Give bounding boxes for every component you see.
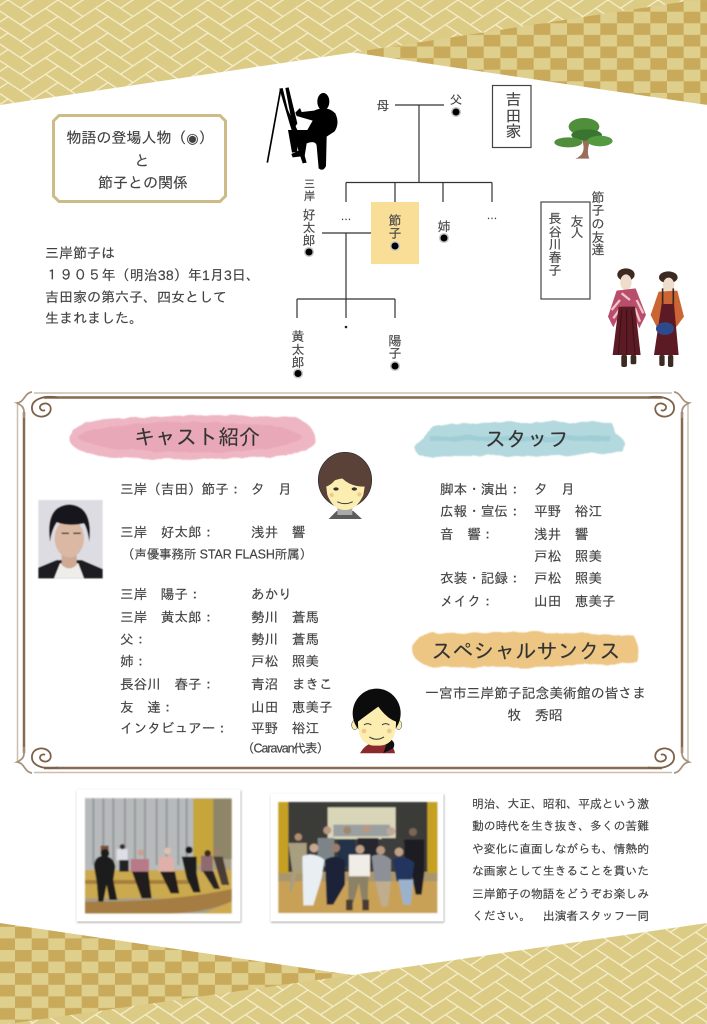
intro text: 吉田家の第六子、四女として	[45, 289, 227, 305]
box: yoshida family: 吉田家	[504, 91, 520, 139]
staff list: 山田 恵美子	[534, 594, 616, 609]
box: yoshida family	[492, 86, 531, 148]
staff list: 戸松 照美	[534, 571, 602, 586]
cast list: 父：	[120, 632, 147, 647]
cast list: 勢川 蒼馬	[251, 610, 319, 625]
panel: cast and staff frame	[17, 392, 689, 773]
cast list: あかり	[251, 587, 292, 602]
heading: special thanks	[412, 632, 639, 667]
special thanks text: 一宮市三岸節子記念美術館の皆さま	[425, 686, 646, 701]
label: father: 父	[450, 93, 462, 107]
label: miyoshi: 三岸	[303, 178, 315, 202]
label: elder sister: 姉	[436, 220, 452, 233]
cast list: （声優事務所 STAR FLASH所属）	[122, 548, 312, 562]
staff list: 広報・宣伝：	[440, 504, 522, 519]
closing message: や変化に直面しながらも、情熱的	[472, 842, 649, 856]
photo: group portrait	[270, 794, 444, 922]
closing message	[472, 797, 649, 923]
cast list: 姉：	[120, 654, 147, 669]
label: hasegawa haruko: 長谷川春子	[548, 212, 562, 276]
box: friends	[541, 202, 590, 299]
label: yoko: 陽子	[388, 334, 402, 360]
label: mother: 母	[377, 99, 389, 113]
icon: black haired avatar	[352, 689, 402, 753]
staff list: 音 響：	[440, 527, 494, 542]
intro text: 三岸節子は	[45, 245, 115, 261]
heading: cast	[70, 415, 316, 459]
cast list: 友 達：	[120, 700, 174, 715]
heading: staff	[416, 422, 624, 456]
label: ellipsis right: …	[486, 210, 498, 222]
illustration: girls in hakama	[608, 268, 684, 367]
closing message: な画家として生きることを貫いた	[472, 864, 649, 878]
heading: special thanks: スペシャルサンクス	[432, 640, 620, 664]
corner flourishes	[17, 392, 689, 773]
closing message: 三岸節子の物語をどうぞお楽しみ	[472, 887, 649, 901]
cast list: 長谷川 春子：	[120, 677, 215, 692]
special thanks text	[425, 686, 646, 723]
cast list: 山田 恵美子	[251, 700, 333, 715]
photo: actor portrait	[38, 500, 103, 578]
label: setsuko's friends: 節子の友達	[590, 190, 606, 256]
cast list: 三岸 黄太郎：	[120, 610, 215, 625]
tree connector lines	[297, 105, 492, 318]
cast list: 浅井 響	[251, 525, 305, 540]
label: kotaro: 好太郎	[302, 208, 316, 246]
title box: と	[134, 153, 150, 170]
cast list: 三岸 好太郎：	[120, 525, 215, 540]
label: friend: 友人	[570, 214, 584, 240]
cast list: 勢川 蒼馬	[251, 632, 319, 647]
highlighted box: setsuko	[371, 202, 419, 264]
staff list: メイク：	[440, 594, 494, 609]
intro text	[45, 245, 260, 326]
family tree	[290, 93, 581, 378]
cast list: 戸松 照美	[251, 654, 319, 669]
title box	[54, 116, 226, 202]
closing message: 動の時代を生き抜き、多くの苦難	[472, 819, 649, 833]
cast list: 青沼 まきこ	[251, 677, 333, 692]
girl in orange kimono	[651, 271, 684, 367]
staff list: 戸松 照美	[534, 549, 602, 564]
icon: woman avatar	[318, 452, 372, 519]
cast list: 夕 月	[251, 482, 292, 497]
cast list: 平野 裕江	[251, 721, 319, 736]
title box: 物語の登場人物（◉）	[66, 130, 214, 147]
label: setsuko: 節子	[388, 214, 402, 240]
girl in pink kimono	[608, 268, 646, 367]
closing message: ください。 出演者スタッフ一同	[472, 909, 649, 923]
title box: 節子との関係	[98, 175, 188, 192]
special thanks text: 牧 秀昭	[507, 708, 563, 723]
staff list: 平野 裕江	[534, 504, 602, 519]
staff list: 浅井 響	[534, 527, 588, 542]
label: ellipsis left: …	[340, 211, 352, 223]
icon: painter silhouette	[267, 87, 338, 170]
staff list	[440, 482, 616, 609]
label: kitaro: 黄太郎	[290, 330, 306, 368]
photo: rehearsal on stage	[76, 790, 240, 922]
staff list: 脚本・演出：	[440, 482, 522, 497]
cast list: 三岸（吉田）節子：	[120, 482, 242, 497]
staff list: 夕 月	[534, 482, 575, 497]
cast list: インタビュアー：	[120, 721, 229, 736]
heading: cast: キャスト紹介	[134, 426, 260, 450]
closing message: 明治、大正、昭和、平成という激	[472, 797, 649, 811]
cast list: （Caravan代表）	[242, 742, 329, 756]
frame lines	[18, 393, 688, 772]
staff list: 衣装・記録：	[440, 571, 522, 586]
label: small dot	[345, 326, 347, 328]
cast list: 三岸 陽子：	[120, 587, 202, 602]
cast list	[120, 482, 333, 756]
icon: pine tree	[554, 118, 613, 159]
character markers	[294, 108, 581, 378]
intro text: １９０５年（明治38）年1月3日、	[45, 267, 260, 283]
heading: staff: スタッフ	[485, 428, 569, 452]
intro text: 生まれました。	[45, 310, 143, 326]
